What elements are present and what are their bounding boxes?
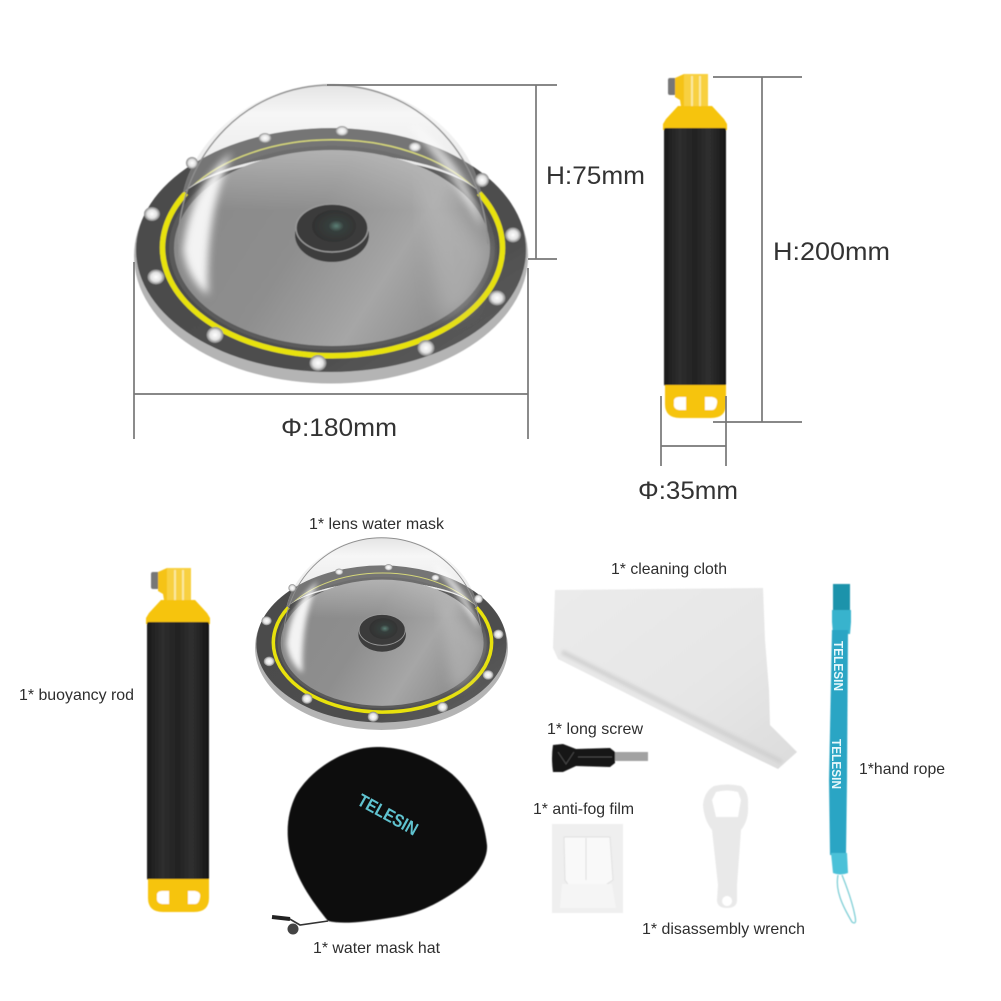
- dome product photo with dimensions: [134, 85, 645, 442]
- cloth: [553, 588, 797, 769]
- pouch drawstring: [272, 917, 328, 934]
- pouch logo: TELESIN: [354, 790, 421, 839]
- film packet: [552, 824, 623, 913]
- film label: 1* anti-fog film: [533, 801, 634, 818]
- rod illustration: [663, 74, 727, 418]
- screw label: 1* long screw: [547, 721, 643, 738]
- strap: [829, 584, 856, 923]
- dome diameter label: Φ:180mm: [281, 414, 397, 442]
- rod height label: H:200mm: [773, 238, 890, 266]
- rod label: 1* buoyancy rod: [19, 687, 134, 704]
- dome illustration: [134, 85, 528, 384]
- rod height dimension line: [713, 77, 802, 422]
- dome label: 1* lens water mask: [309, 516, 445, 533]
- item: hand rope: [829, 584, 945, 923]
- item: anti-fog film: [533, 801, 634, 913]
- black pouch: [288, 747, 487, 923]
- item: disassembly wrench: [642, 784, 805, 938]
- rod diameter dimension line: [661, 396, 726, 466]
- wrench label: 1* disassembly wrench: [642, 921, 805, 938]
- strap logo lower: TELESIN: [829, 739, 844, 789]
- buoyancy rod photo with dimensions: [638, 74, 890, 505]
- strap logo upper: TELESIN: [831, 641, 846, 691]
- screw: [552, 744, 648, 772]
- rod picture: [146, 568, 210, 912]
- cloth label: 1* cleaning cloth: [611, 561, 727, 578]
- strap label: 1*hand rope: [859, 761, 945, 778]
- dome picture: [255, 538, 508, 730]
- item: long screw: [547, 721, 648, 772]
- item: buoyancy rod: [19, 568, 210, 912]
- item: lens water mask: [255, 516, 508, 730]
- dome height label: H:75mm: [546, 162, 645, 190]
- pouch label: 1* water mask hat: [313, 940, 441, 957]
- wrench: [703, 784, 748, 908]
- rod diameter label: Φ:35mm: [638, 477, 738, 505]
- item: water mask hat: [272, 747, 487, 957]
- item: cleaning cloth: [553, 561, 797, 769]
- dome height dimension line: [327, 85, 557, 259]
- dome diameter dimension line: [134, 262, 528, 439]
